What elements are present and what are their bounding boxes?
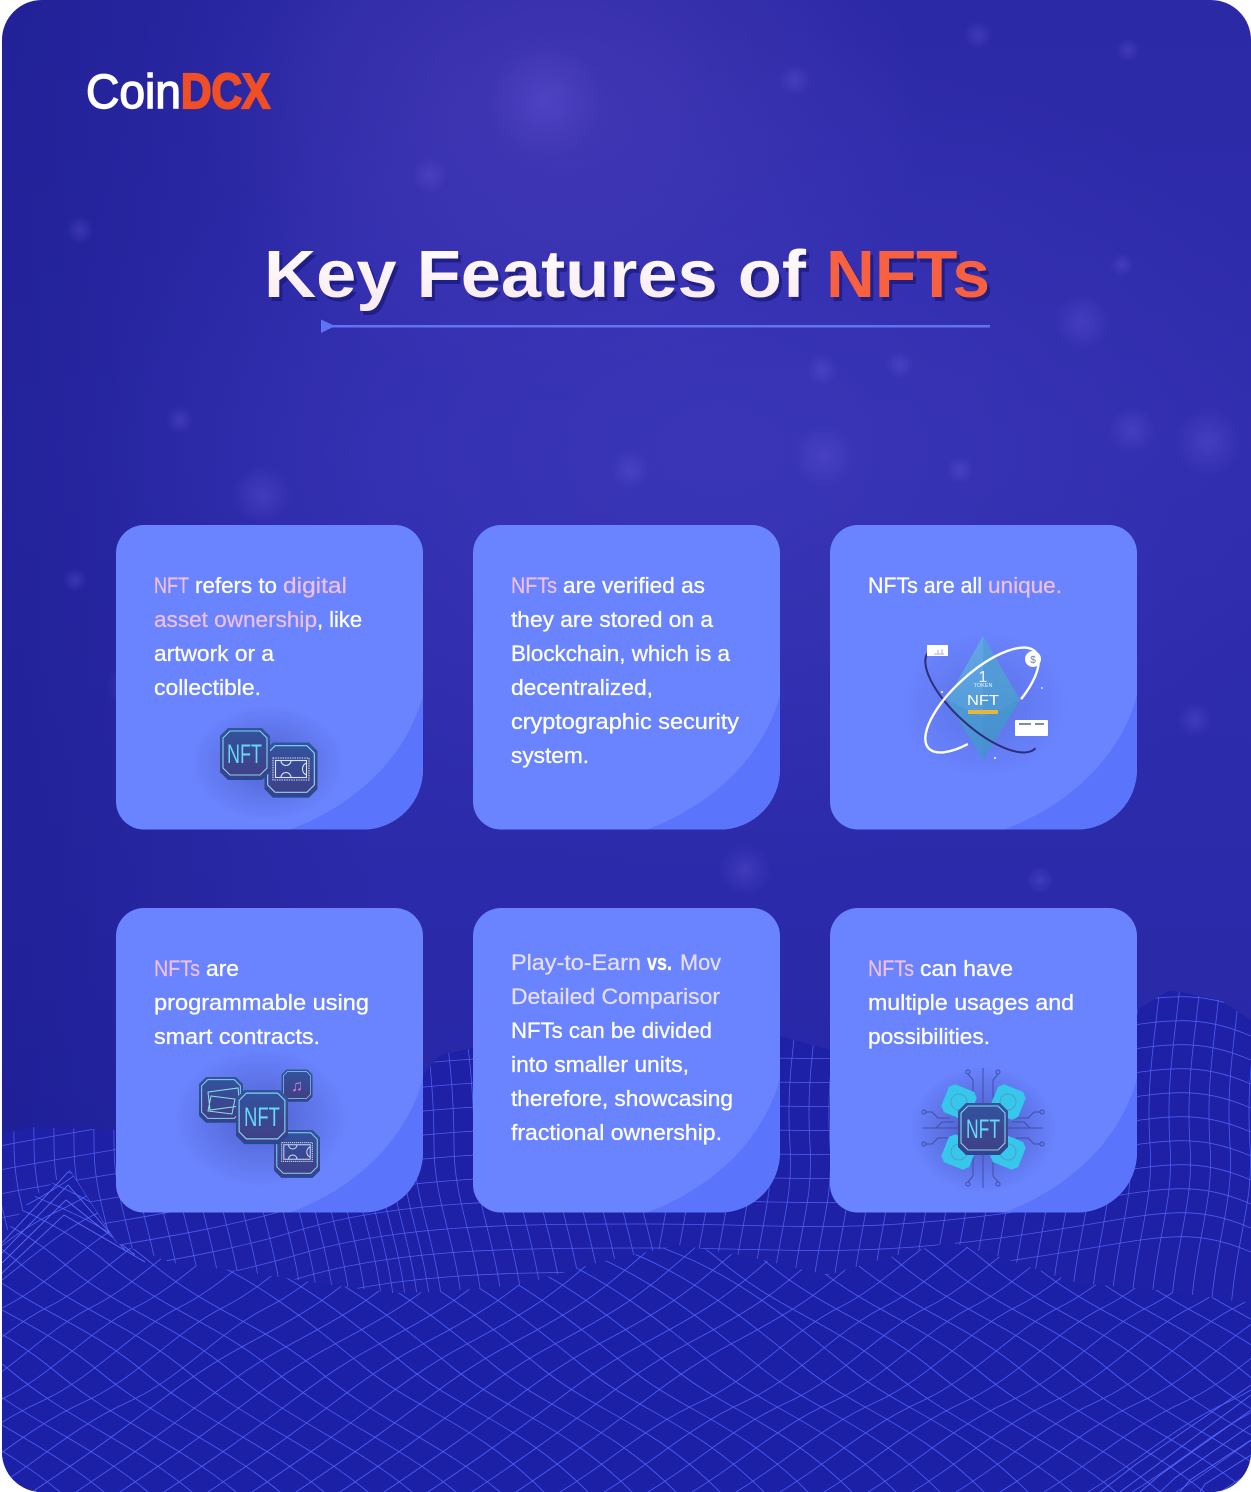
- card 1: digital asset ownership: [116, 525, 423, 830]
- card 1 text: [154, 573, 362, 700]
- card 5 text: into smaller units,: [511, 1052, 689, 1077]
- card 2 text: decentralized,: [511, 675, 653, 700]
- card 5 text: Play-to-Earn: [511, 950, 641, 975]
- card 1 text: asset ownership: [154, 607, 317, 632]
- title: Key Features of: [267, 241, 810, 316]
- card 5 text: therefore, showcasing: [511, 1086, 733, 1111]
- logo: CoinDCX: [86, 65, 270, 119]
- card 1 text: , like: [317, 607, 362, 632]
- card 2 text: system.: [511, 743, 589, 768]
- icon: NFT chip linked to image, music and artwork chips: [173, 1048, 349, 1188]
- card 2 text: NFTs: [511, 573, 557, 598]
- card 6: multiple usages: [830, 908, 1137, 1212]
- wireframe terrain: rear mesh: [2, 990, 1251, 1300]
- card 5 text: vs.: [647, 950, 672, 975]
- card 5 text: fractional ownership.: [511, 1120, 722, 1145]
- card 2 text: cryptographic security: [511, 709, 739, 734]
- card 2 text: they are stored on a: [511, 607, 714, 632]
- title: Key Features of: [264, 237, 807, 312]
- card 2 text: [511, 573, 739, 768]
- card 6 text: multiple usages and: [868, 990, 1074, 1015]
- card 4 text: [154, 956, 369, 1049]
- card 1 text: NFT: [154, 573, 189, 598]
- wireframe terrain: front mesh: [2, 1170, 1251, 1492]
- icon: one-token NFT diamond with orbits: TOKEN: [974, 683, 992, 689]
- card 2 text: Blockchain, which is a: [511, 641, 731, 666]
- logo: CoinDCX: Coin: [86, 66, 181, 119]
- card 4 text: smart contracts.: [154, 1024, 320, 1049]
- icon: NFT chip linked to image, music and artwork chips: NFT: [244, 1102, 280, 1132]
- icon: one-token NFT diamond with orbits: 1: [979, 669, 988, 686]
- icon: NFT chip linked to image, music and artwork chips: ♫: [291, 1078, 303, 1095]
- card 5 text: Detailed Comparisor: [511, 984, 720, 1009]
- card 3: NFTs are unique: [830, 525, 1137, 830]
- card 5 text: NFTs can be divided: [511, 1018, 712, 1043]
- title: [264, 237, 993, 316]
- icon: NFT chip with artwork chip: NFT: [227, 739, 262, 769]
- card 5 text: [511, 950, 733, 1145]
- title underline arrow: [321, 320, 990, 333]
- icon: one-token NFT diamond with orbits: NFT: [967, 692, 999, 709]
- icon: NFT chip with artwork chip: [190, 705, 346, 821]
- icon: NFT circuit chip with cyan nodes: [909, 1066, 1057, 1194]
- card 6 text: can have: [920, 956, 1013, 981]
- icon: one-token NFT diamond with orbits: $: [1030, 655, 1036, 666]
- card 2 text: are verified as: [563, 573, 705, 598]
- card 6 text: [868, 956, 1074, 1049]
- card 3 text: NFTs are all: [868, 573, 982, 598]
- card 6 text: NFTs: [868, 956, 914, 981]
- card 6 text: possibilities.: [868, 1024, 990, 1049]
- card 3 text: unique.: [988, 573, 1062, 598]
- card 1 text: collectible.: [154, 675, 261, 700]
- card 3 text: [868, 573, 1062, 598]
- card 4 text: programmable using: [154, 990, 369, 1015]
- title: NFTs: [829, 241, 993, 316]
- card 4 text: are: [206, 956, 239, 981]
- icon: one-token NFT diamond with orbits: [900, 630, 1070, 780]
- icon: NFT circuit chip with cyan nodes: NFT: [966, 1114, 1000, 1144]
- logo: CoinDCX: DCX: [181, 65, 270, 119]
- card 4 text: NFTs: [154, 956, 200, 981]
- card 1 text: digital: [283, 573, 347, 598]
- card 4: programmable with smart contracts: [116, 908, 423, 1212]
- card 1 text: refers to: [195, 573, 277, 598]
- card 5: fractional ownership: [473, 908, 780, 1212]
- card 1 text: artwork or a: [154, 641, 275, 666]
- card 5 text: Mov: [680, 950, 721, 975]
- title: NFTs: [826, 237, 990, 312]
- card 2: verified on blockchain: [473, 525, 780, 830]
